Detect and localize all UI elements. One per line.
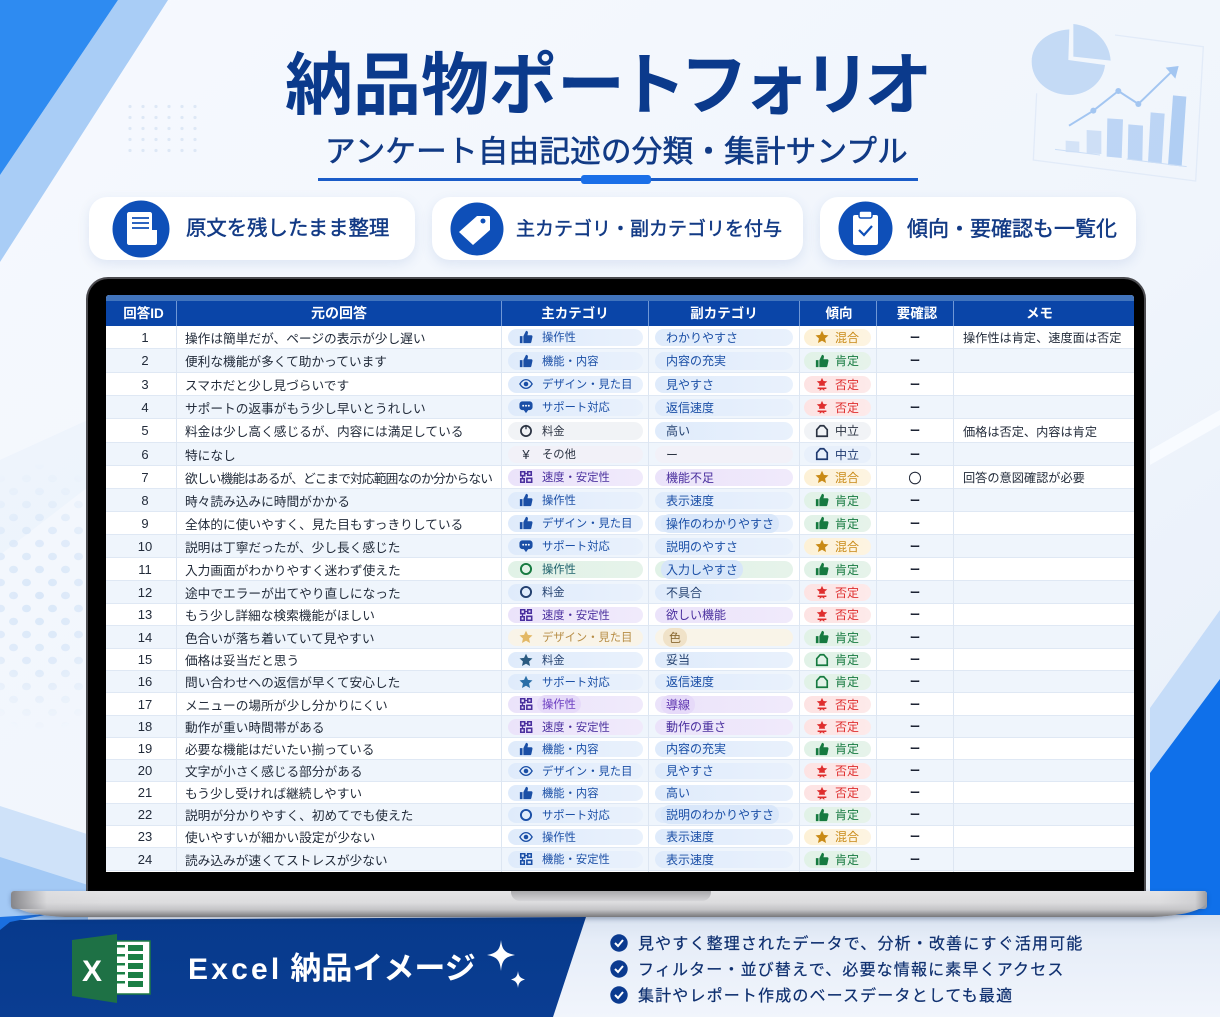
row 15 <box>106 649 1134 671</box>
icon: Excel logo: X <box>82 955 102 988</box>
row 20 <box>106 760 1134 782</box>
row 9: ー <box>910 518 920 530</box>
row 5: 料金は少し高く感じるが、内容には満足している <box>185 425 464 439</box>
row 18: 否定 <box>835 720 859 734</box>
row 24: 肯定 <box>835 852 859 866</box>
row 22 <box>106 804 1134 826</box>
row 12: ー <box>910 586 920 598</box>
row 13: 否定 <box>835 608 859 622</box>
row 3 <box>106 373 1134 396</box>
row 23: 操作性 <box>542 832 576 844</box>
icon: check 3 <box>610 986 628 1004</box>
row 11: ー <box>910 564 920 576</box>
row 14: 肯定 <box>835 630 859 644</box>
benefit 3: 集計やレポート作成のベースデータとしても最適 <box>638 988 1013 1005</box>
row 6: ー <box>910 448 920 460</box>
row 11: 入力画面がわかりやすく迷わず使えた <box>185 564 401 578</box>
row 6: ¥ <box>522 446 530 462</box>
row 3: 否定 <box>835 378 859 392</box>
header row: 要確認 <box>897 306 937 321</box>
row 12 <box>106 581 1134 604</box>
row 9: 全体的に使いやすく、見た目もすっきりしている <box>185 518 463 532</box>
row 13: 欲しい機能 <box>666 608 726 622</box>
header row: 回答ID <box>123 306 164 321</box>
row 4: サポート対応 <box>542 402 610 414</box>
row 19 <box>106 738 1134 760</box>
row 15: ー <box>910 654 920 666</box>
row 19: 肯定 <box>835 742 859 756</box>
row 4: 否定 <box>835 400 859 414</box>
row 22: 説明が分かりやすく、初めてでも使えた <box>185 809 413 823</box>
row 23: 混合 <box>835 830 859 844</box>
row 6: ー <box>666 448 678 462</box>
row 19: 必要な機能はだいたい揃っている <box>185 743 374 757</box>
row 11: 肯定 <box>835 562 859 576</box>
row 3: スマホだと少し見づらいです <box>185 378 349 392</box>
row 21: 機能・内容 <box>542 788 598 800</box>
subtitle underline <box>318 175 918 184</box>
row 4: ー <box>910 402 920 414</box>
row 1: 混合 <box>835 330 859 344</box>
row 3: 見やすさ <box>666 378 714 392</box>
row 17 <box>106 693 1134 716</box>
row 10: 混合 <box>835 540 859 554</box>
row 9: 操作のわかりやすさ <box>666 516 774 530</box>
row 8: 時々読み込みに時間がかかる <box>185 494 350 508</box>
row 11 <box>106 558 1134 581</box>
row 24: 機能・安定性 <box>542 854 610 866</box>
row 1: 操作性 <box>542 332 576 344</box>
row 15: 15 <box>138 652 152 667</box>
row 2: 内容の充実 <box>666 354 726 368</box>
benefit 2: フィルター・並び替えで、必要な情報に素早くアクセス <box>638 962 1065 979</box>
row 9: 9 <box>141 516 149 530</box>
row 20: 20 <box>138 763 152 778</box>
laptop bezel <box>86 277 1146 893</box>
row 11: 11 <box>138 562 152 576</box>
icon: check 2 <box>610 960 628 978</box>
icon: clipboard <box>838 202 892 256</box>
feature card: categories <box>432 197 803 260</box>
row 1: ー <box>910 332 920 344</box>
row 21: 21 <box>138 785 152 800</box>
row 7: 混合 <box>835 470 859 484</box>
row 20: 文字が小さく感じる部分がある <box>185 765 363 779</box>
feature card: trends <box>820 197 1136 260</box>
row 1: 操作は簡単だが、ページの表示が少し遅い <box>185 332 426 346</box>
row 7: 速度・安定性 <box>542 472 610 484</box>
row 1: わかりやすさ <box>666 330 738 344</box>
row 22: サポート対応 <box>542 810 610 822</box>
row 7: 機能不足 <box>666 470 714 484</box>
benefit 1: 見やすく整理されたデータで、分析・改善にすぐ活用可能 <box>638 936 1083 953</box>
row 18: 動作が重い時間帯がある <box>185 721 325 735</box>
row 13: もう少し詳細な検索機能がほしい <box>185 609 375 623</box>
row 4: 返信速度 <box>666 400 714 414</box>
row 3: ー <box>910 378 920 390</box>
row 12: 料金 <box>542 587 565 599</box>
row 24: 表示速度 <box>666 852 714 866</box>
row 4 <box>106 396 1134 419</box>
row 9 <box>106 512 1134 535</box>
row 24: 24 <box>138 852 152 866</box>
row 23: 使いやすいが細かい設定が少ない <box>185 831 375 845</box>
row 20: 否定 <box>835 764 859 778</box>
header row: 副カテゴリ <box>690 306 758 321</box>
row 12: 否定 <box>835 586 859 600</box>
row 11: 入力しやすさ <box>666 562 738 576</box>
row 7: 欲しい機能はあるが、どこまで対応範囲なのか分からない <box>185 472 492 486</box>
row 6: 中立 <box>835 448 859 462</box>
row 14 <box>106 626 1134 649</box>
row 5: 料金 <box>542 426 565 438</box>
spreadsheet table <box>106 295 1134 872</box>
row 10: サポート対応 <box>542 541 610 553</box>
row 13 <box>106 604 1134 626</box>
row 15: 肯定 <box>835 653 859 667</box>
row 21 <box>106 782 1134 804</box>
row 14: 色 <box>669 630 681 644</box>
row 14: デザイン・見た目 <box>542 632 632 644</box>
row 5: 5 <box>141 423 149 438</box>
row 23: ー <box>910 831 920 843</box>
row 20: デザイン・見た目 <box>542 766 632 778</box>
row 3: デザイン・見た目 <box>542 379 632 391</box>
row 19: 内容の充実 <box>666 742 726 756</box>
row 12: 12 <box>138 584 152 600</box>
row 22: 22 <box>138 807 152 822</box>
row 16: サポート対応 <box>542 676 610 688</box>
row 1 <box>106 326 1134 349</box>
row 2: 便利な機能が多くて助かっています <box>185 355 387 369</box>
row 10: 説明のやすさ <box>666 540 738 554</box>
header row <box>106 301 1134 326</box>
row 13: ー <box>910 609 920 621</box>
row 17: 導線 <box>666 698 690 712</box>
row 2: 2 <box>141 353 149 368</box>
row 17: 操作性 <box>542 699 576 711</box>
row 16: 16 <box>138 674 152 689</box>
laptop end shading <box>11 891 1207 909</box>
row 19: 19 <box>138 741 152 756</box>
row 2: ー <box>910 355 920 367</box>
header row: メモ <box>1026 306 1053 321</box>
row 24: ー <box>910 854 920 866</box>
row 20: ー <box>910 765 920 777</box>
row 17: ー <box>910 698 920 710</box>
row 6: 特になし <box>185 448 236 462</box>
icon: sparkles <box>487 940 525 988</box>
header accent strip <box>106 295 1134 301</box>
row 18 <box>106 716 1134 738</box>
row 13: 13 <box>138 607 152 622</box>
row 22: 肯定 <box>835 808 859 822</box>
row 14: 色合いが落ち着いていて見やすい <box>185 632 375 646</box>
card label: 主カテゴリ・副カテゴリを付与 <box>516 219 782 240</box>
row 24: 読み込みが速くてストレスが少ない <box>185 854 388 868</box>
row 23: 表示速度 <box>666 830 714 844</box>
card label: 傾向・要確認も一覧化 <box>907 218 1117 241</box>
icon: analytics chart illustration <box>1032 24 1204 182</box>
row 7: 回答の意図確認が必要 <box>963 471 1085 485</box>
icon: check 1 <box>610 934 628 952</box>
row 18: 18 <box>138 719 152 734</box>
icon: tag <box>450 202 504 256</box>
row 2 <box>106 349 1134 373</box>
header row: 傾向 <box>826 306 852 321</box>
row 6 <box>106 443 1134 466</box>
title: 納品物ポートフォリオ <box>285 48 926 124</box>
icon: Excel logo <box>72 934 151 1003</box>
row 4: 4 <box>141 400 149 414</box>
row 5 <box>106 419 1134 443</box>
row 24 <box>106 848 1134 871</box>
row 8: 操作性 <box>542 495 576 507</box>
laptop base <box>11 891 1207 917</box>
row 5: 価格は否定、内容は肯定 <box>963 424 1097 438</box>
row 11: 操作性 <box>542 564 576 576</box>
row 7: ○ <box>908 468 922 486</box>
card label: 原文を残したまま整理 <box>186 218 389 240</box>
row 16: 返信速度 <box>666 675 714 689</box>
row 10: 説明は丁寧だったが、少し長く感じた <box>185 540 400 554</box>
row 22: 説明のわかりやすさ <box>666 808 774 822</box>
row 15: 価格は妥当だと思う <box>185 654 299 668</box>
row 22: ー <box>910 809 920 821</box>
row 19: 機能・内容 <box>542 744 598 756</box>
header row: 元の回答 <box>311 305 367 321</box>
row 18: ー <box>910 721 920 733</box>
row 21: もう少し受ければ継続しやすい <box>185 787 362 801</box>
feature card: keep original text <box>89 197 415 260</box>
row 8: ー <box>910 494 920 506</box>
row 16 <box>106 671 1134 693</box>
row 7: 7 <box>141 470 149 484</box>
subtitle: アンケート自由記述の分類・集計サンプル <box>325 135 908 169</box>
row 14: ー <box>910 632 920 644</box>
row 1: 操作性は肯定、速度面は否定 <box>963 331 1121 345</box>
row 13: 速度・安定性 <box>542 610 610 622</box>
row 18: 動作の重さ <box>666 720 726 734</box>
row 8: 8 <box>141 492 149 508</box>
row 16: ー <box>910 676 920 688</box>
row 20: 見やすさ <box>666 764 714 778</box>
row 16: 問い合わせへの返信が早くて安心した <box>185 676 400 690</box>
row 10: ー <box>910 540 920 552</box>
row 17: 否定 <box>835 698 859 712</box>
row 5: 中立 <box>835 424 859 438</box>
footer heading: Excel 納品イメージ <box>188 951 476 986</box>
row 2: 機能・内容 <box>542 356 598 368</box>
laptop notch <box>511 891 711 901</box>
row 21: 否定 <box>835 786 859 800</box>
row 23 <box>106 826 1134 848</box>
row 19: ー <box>910 743 920 755</box>
row 7 <box>106 466 1134 489</box>
row 12: 途中でエラーが出てやり直しになった <box>185 586 401 600</box>
row 8: 肯定 <box>835 494 859 508</box>
header row: 主カテゴリ <box>541 306 609 321</box>
row 9: デザイン・見た目 <box>542 518 632 530</box>
row 15: 料金 <box>542 654 565 666</box>
row 18: 速度・安定性 <box>542 722 610 734</box>
row 23: 23 <box>138 829 152 844</box>
row 17: メニューの場所が少し分かりにくい <box>185 698 388 712</box>
row 12: 不具合 <box>666 586 702 600</box>
row 16: 肯定 <box>835 675 859 689</box>
row 2: 肯定 <box>835 354 859 368</box>
row 6: その他 <box>542 449 576 461</box>
row 1: 1 <box>141 330 149 344</box>
row 17: 17 <box>138 696 152 712</box>
row 14: 14 <box>138 630 152 644</box>
footer banner <box>0 914 586 1017</box>
row 5: ー <box>910 425 920 437</box>
row 8: 表示速度 <box>666 494 714 508</box>
row 8 <box>106 489 1134 512</box>
row 10: 10 <box>138 538 152 554</box>
row 10 <box>106 535 1134 558</box>
icon: document <box>112 200 170 258</box>
row 4: サポートの返事がもう少し早いとうれしい <box>185 402 426 416</box>
row 5: 高い <box>666 424 690 438</box>
row 3: 3 <box>141 376 149 392</box>
row 21: 高い <box>666 786 690 800</box>
row 21: ー <box>910 787 920 799</box>
row 6: 6 <box>141 446 149 462</box>
row 9: 肯定 <box>835 516 859 530</box>
row 15: 妥当 <box>666 653 690 667</box>
